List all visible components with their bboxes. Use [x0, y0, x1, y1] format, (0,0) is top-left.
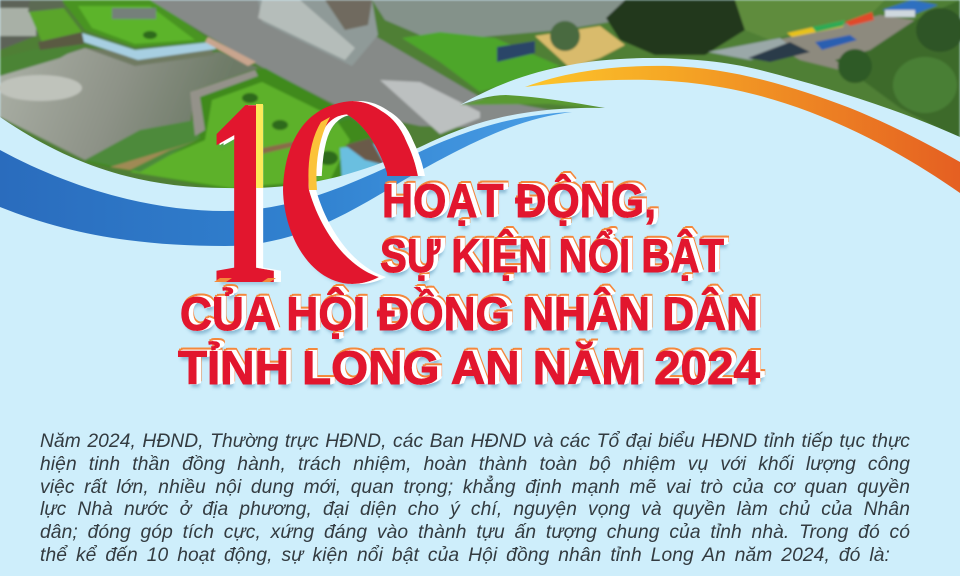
- intro paragraph: việc rất lớn, nhiều nội dung mới, quan trọng; khẳng định mạnh mẽ vai trò của cơ quan quyền: [40, 476, 910, 498]
- island wall: [82, 33, 216, 60]
- small bridge deck: [205, 37, 256, 66]
- digit 0: [283, 101, 425, 288]
- island reflection: [85, 48, 215, 66]
- sand area: [535, 26, 625, 68]
- top left grass: [28, 6, 82, 42]
- yellow highlight on digit 0: [308, 117, 330, 190]
- stress of digit 0: [283, 101, 418, 284]
- right trees: [835, 0, 960, 140]
- bank wall: [190, 70, 258, 136]
- shrubs: [242, 93, 338, 165]
- crosswalk: [380, 80, 480, 134]
- intro paragraph: lực Nhà nước ở địa phương, đại diện cho ý chí, nguyện vọng và quyền làm chủ của Nhân: [40, 499, 910, 520]
- pavement: [770, 15, 925, 70]
- title line 4: TỈNH LONG AN NĂM 2024: [178, 341, 760, 394]
- title line 2: SỰ KIỆN NỔI BẬT: [380, 229, 724, 282]
- digit 0: 0: [276, 43, 426, 340]
- dark trees: [606, 0, 745, 55]
- intro paragraph: [40, 431, 910, 566]
- concrete platform: [340, 142, 392, 180]
- title line 3: CỦA HỘI ĐỒNG NHÂN DÂN: [180, 287, 758, 340]
- water highlight: [0, 75, 82, 101]
- intro paragraph: thể kể đến 10 hoạt động, sự kiện nổi bật của Hội đồng nhân tỉnh Long An năm 2024, đó là:: [40, 545, 890, 566]
- top middle water: [372, 0, 625, 37]
- intro paragraph: hiện tinh thần đồng hành, trách nhiệm, hoàn thành toàn bộ nhiệm vụ với khối lượng công: [40, 454, 910, 475]
- blue swoosh: [0, 112, 572, 246]
- center island grass: [85, 68, 400, 190]
- river water left: [0, 48, 258, 160]
- big number 10: [214, 101, 425, 288]
- tree: [550, 21, 580, 51]
- orange swoosh: [525, 66, 960, 193]
- right island grass: [402, 32, 560, 92]
- umbrellas: [787, 20, 845, 37]
- wedge grass: [460, 92, 610, 110]
- top right greenery: [735, 0, 885, 40]
- photo: aerial view of bridge and river: [0, 0, 960, 200]
- title line 1: HOẠT ĐỘNG,: [382, 174, 656, 227]
- intro paragraph: Năm 2024, HĐND, Thường trực HĐND, các Ban HĐND và các Tổ đại biểu HĐND tỉnh tiếp tục thực: [40, 431, 910, 452]
- hyacinth bank: [0, 44, 85, 76]
- intro paragraph: dân; đóng góp tích cực, xứng đáng vào thành tựu ấn tượng chung của tỉnh nhà. Trong đó có: [40, 522, 910, 543]
- upper left island grass: [62, 0, 212, 47]
- road main: [150, 0, 560, 128]
- top left houses: [0, 0, 38, 50]
- trench lines: [262, 135, 326, 154]
- orange foot of digit 1: [214, 278, 276, 282]
- blue seats: [815, 35, 857, 50]
- title: [178, 174, 760, 394]
- market roof: [708, 38, 795, 60]
- bridge structure: [258, 0, 378, 66]
- yellow highlight on digit 1: [256, 104, 263, 188]
- left bank vegetation: [85, 120, 200, 172]
- digit 1: 1: [204, 43, 282, 340]
- road sign: [497, 41, 535, 62]
- blue tent: [882, 0, 938, 14]
